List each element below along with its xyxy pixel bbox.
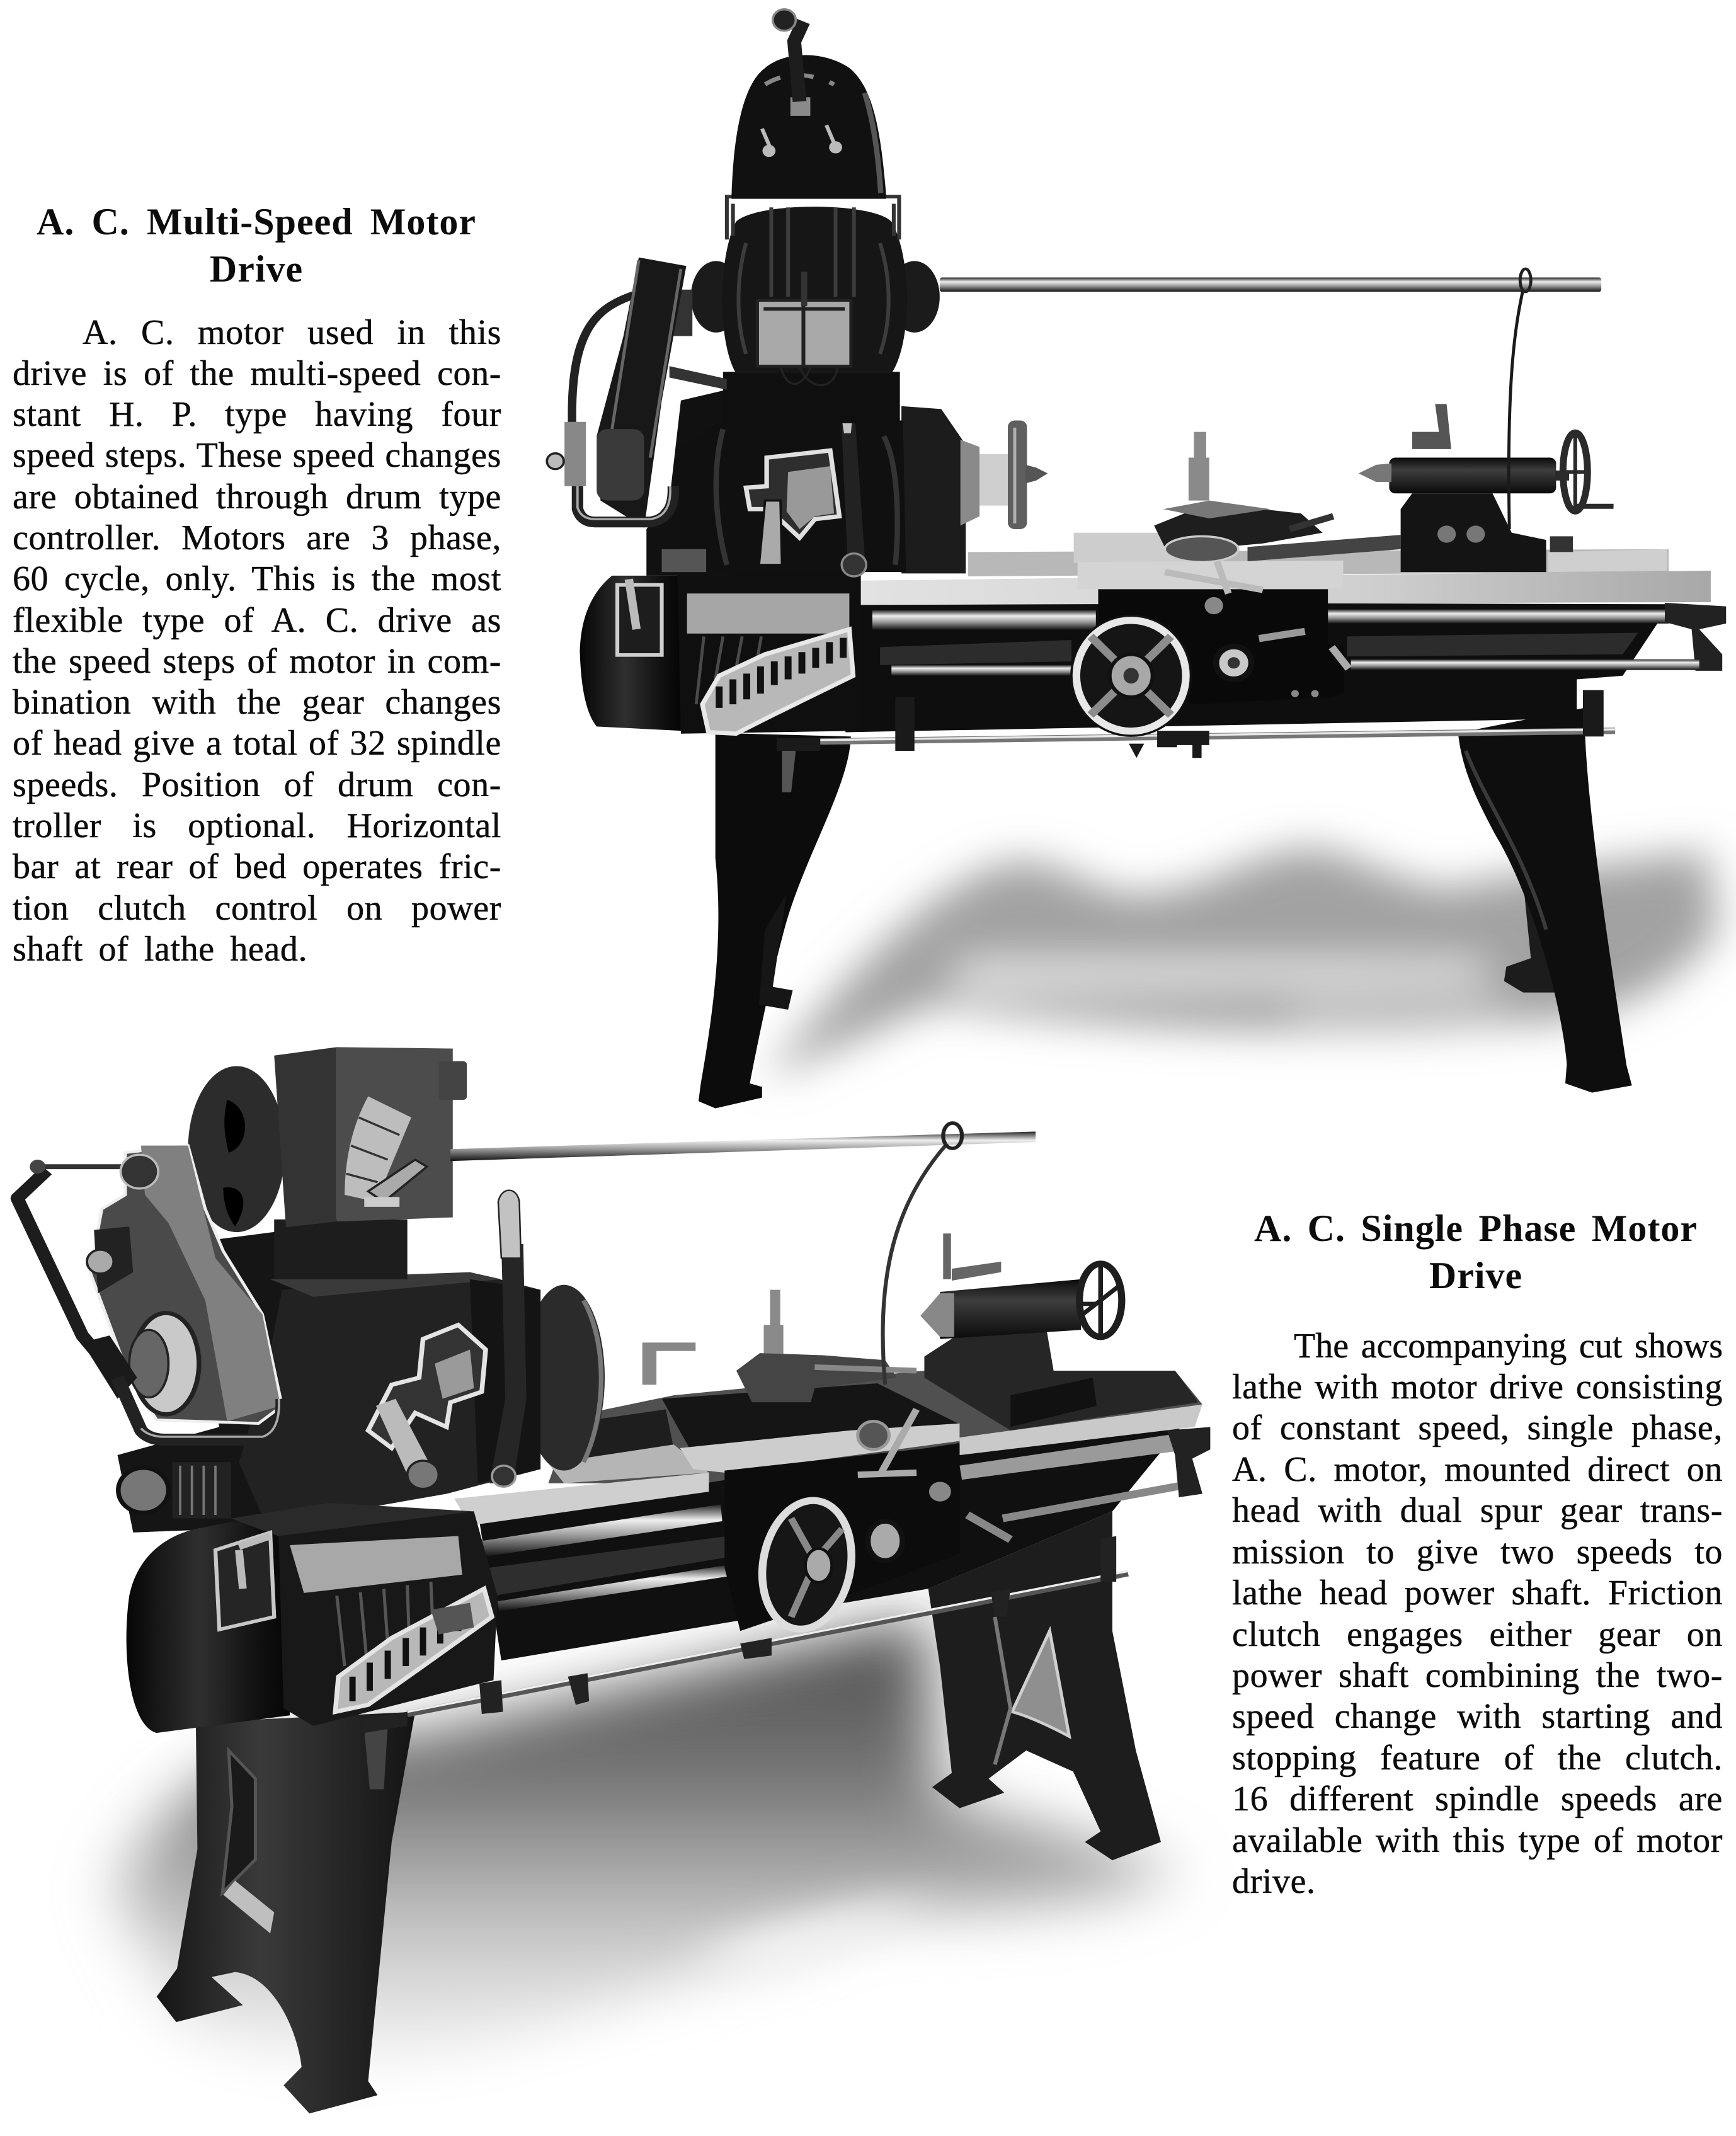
gearbox ribs [696, 636, 762, 704]
body text: multi-speed: 60 cycle, only. This is the most [13, 559, 501, 598]
shift handle [759, 501, 782, 565]
heading: multi-speed: A. C. Multi-Speed Motor [37, 201, 476, 243]
head rear cover [901, 406, 966, 573]
apron [724, 1444, 959, 1631]
body text: single phase: head with dual spur gear trans- [1232, 1491, 1723, 1530]
controller side [274, 1047, 337, 1227]
speed index plate [702, 629, 853, 734]
apron controls [1165, 561, 1349, 697]
head stock [239, 1276, 540, 1526]
controller handle [364, 1197, 399, 1206]
feed rod right [1351, 660, 1699, 670]
gear teeth [180, 1466, 215, 1515]
body text: multi-speed: A. C. motor used in this [83, 312, 501, 351]
illustration: lathe with A.C. multi-speed motor drive [547, 9, 1726, 1109]
starter lever [801, 271, 808, 306]
control rod highlight [819, 729, 1615, 740]
rear right leg [1504, 844, 1563, 993]
lever foot [842, 554, 866, 576]
control rod [819, 731, 1615, 741]
tailstock clamp [1412, 404, 1451, 449]
starter panel [758, 300, 851, 366]
star handles [858, 1409, 917, 1475]
gear mass behind guard [118, 1230, 313, 1533]
body text: multi-speed: controller. Motors are 3 phase, [13, 518, 501, 557]
cross slide [662, 1383, 959, 1455]
control rod [408, 1573, 1128, 1714]
gearbox case [677, 568, 861, 734]
dial hub [1228, 657, 1240, 668]
clutch lever [840, 392, 865, 566]
motor [188, 1066, 285, 1232]
rod ring [1520, 269, 1531, 292]
lead screw right [959, 1431, 1200, 1480]
rear way block [1548, 549, 1667, 572]
slide dial [1165, 536, 1238, 562]
gear guard spokes [94, 1226, 133, 1293]
hood marks [762, 125, 840, 155]
clamp arc [882, 1139, 952, 1385]
clutch bar [940, 277, 1601, 292]
head shift plate [368, 1325, 486, 1448]
clutch bar [450, 1131, 1036, 1161]
gear shift lever plate [617, 585, 662, 655]
body text: multi-speed: bination with the gear changes [13, 683, 501, 722]
head highlight [716, 429, 898, 565]
lead screw end bracket [1665, 603, 1726, 671]
bed mid highlight [880, 633, 1638, 665]
body text: single phase: available with this type of motor [1232, 1821, 1723, 1860]
lever on leg [782, 751, 796, 792]
motor support [723, 372, 900, 423]
carriage hand wheel [1071, 615, 1191, 736]
index notches [353, 1606, 459, 1701]
body text: single phase: of constant speed, single phase, [1232, 1408, 1723, 1448]
body text: multi-speed: speeds. Position of drum con- [13, 765, 501, 804]
compound screw [814, 1367, 917, 1371]
controller front [337, 1047, 453, 1221]
control pipe [578, 486, 673, 522]
apron controls [858, 1409, 1010, 1561]
controller handle [794, 21, 803, 101]
rim [753, 1495, 860, 1635]
rod brackets [777, 690, 1604, 758]
apron knob [929, 1482, 951, 1502]
front left leg [699, 733, 851, 1109]
feed rod left [498, 1565, 730, 1611]
pipe highlight [141, 1399, 279, 1437]
gear shift lever [629, 580, 636, 629]
handle ball [408, 1461, 438, 1489]
heading second line: multi-speed: Drive [210, 248, 303, 290]
controller hub [791, 97, 810, 116]
compound rest [1154, 503, 1323, 552]
shift plate [215, 1533, 274, 1630]
plate inner [787, 466, 834, 529]
motor left bell [691, 261, 741, 333]
head stock [681, 420, 906, 572]
apron [1098, 589, 1344, 704]
gearbox name plate [687, 593, 849, 634]
oil cup [438, 1061, 467, 1100]
spokes [791, 1519, 842, 1617]
head center [1025, 465, 1048, 483]
sector lines [346, 1117, 399, 1182]
floor shadow [118, 1617, 1175, 2062]
far leg highlight [995, 1617, 1010, 1764]
bell highlight [583, 1300, 601, 1462]
tool post [1189, 432, 1209, 501]
bed body [845, 602, 1670, 732]
tailstock hand wheel [1555, 433, 1614, 511]
saddle wing left [1074, 533, 1200, 563]
hood highlight [865, 93, 881, 193]
rear left leg foot [759, 894, 792, 1010]
motor body [722, 207, 907, 374]
face plate [1008, 420, 1027, 529]
leg lever [364, 1726, 388, 1789]
body text: single phase: lathe with motor drive consisting [1232, 1368, 1723, 1407]
saddle [680, 1424, 959, 1473]
handle knob [773, 9, 796, 31]
lead screw right [1328, 609, 1669, 624]
motor ribs [738, 207, 889, 354]
body text: multi-speed: speed steps. These speed changes [13, 436, 501, 475]
far leg window [1012, 1631, 1070, 1737]
heading: single phase: A. C. Single Phase Motor [1254, 1208, 1698, 1249]
body text: multi-speed: stant H. P. type having four [13, 395, 501, 434]
front bed way [857, 571, 1711, 605]
gearbox top [231, 1503, 474, 1536]
starter divider [763, 300, 845, 366]
gear [662, 549, 706, 572]
arm rod [43, 1165, 122, 1169]
near leg window [222, 1750, 255, 1893]
clutch star [858, 1421, 889, 1449]
gear dial [868, 1521, 903, 1561]
top pulley [121, 1155, 158, 1189]
resistor sector [345, 1097, 411, 1202]
top clutch handle [1165, 561, 1263, 593]
body text: single phase: mission to give two speeds to [1232, 1533, 1723, 1572]
body text: multi-speed: troller is optional. Horizontal [13, 806, 501, 845]
body text: single phase: A. C. motor, mounted direct on [1232, 1450, 1723, 1489]
controller mount [274, 1219, 408, 1279]
belt support [670, 290, 727, 390]
guard hub [87, 1250, 113, 1274]
head bracket mass [646, 390, 734, 576]
saddle wing right [1248, 535, 1401, 561]
rim outline [1071, 615, 1191, 736]
tailstock base [924, 1325, 1199, 1431]
motor openings [223, 1100, 245, 1226]
gearbox name plate [290, 1536, 462, 1593]
rear handle [642, 1342, 695, 1385]
gear band [141, 1146, 280, 1421]
hub [1110, 654, 1153, 697]
lead screw left [482, 1504, 722, 1557]
gear dial [1216, 646, 1252, 679]
control rod highlight [408, 1571, 1128, 1712]
spindle nose [961, 440, 979, 525]
body text: single phase: 16 different spindle speeds are [1232, 1779, 1723, 1819]
compound rest [736, 1353, 897, 1402]
body text: multi-speed: flexible type of A. C. drive as [13, 601, 501, 640]
rear bed way [968, 549, 1669, 576]
body text: single phase: stopping feature of the clutch. [1232, 1739, 1723, 1778]
tailstock base [1401, 493, 1546, 572]
hood scale [765, 75, 834, 84]
body text: multi-speed: tion clutch control on power [13, 889, 501, 928]
bed highlight band [489, 1536, 729, 1596]
apron lever [1259, 631, 1305, 639]
compound highlight [1163, 501, 1271, 518]
compound handle [1289, 517, 1333, 529]
rim [1076, 620, 1186, 731]
spindle [979, 454, 1008, 506]
spokes [1090, 636, 1171, 715]
gearbox drum [127, 1511, 290, 1733]
starter wires [780, 366, 838, 385]
index notches [719, 638, 843, 708]
saddle top [1078, 561, 1343, 589]
lever grip [838, 389, 854, 433]
head top [270, 1272, 501, 1297]
belt guard arc [572, 295, 635, 425]
body text: multi-speed: bar at rear of bed operates fric- [13, 847, 501, 886]
head rear bell [523, 1285, 605, 1471]
gearbox ribs [337, 1582, 432, 1666]
carriage hand wheel [753, 1495, 860, 1635]
clutch lever [489, 1244, 527, 1483]
controller arm [368, 1160, 427, 1202]
belt edge highlight [612, 260, 681, 458]
body text: multi-speed: the speed steps of motor in com- [13, 642, 501, 681]
wire frame [727, 197, 899, 239]
far leg [928, 1511, 1161, 1860]
lever foot [492, 1466, 515, 1487]
feed rod right [1003, 1483, 1194, 1519]
body text: single phase: speed change with starting and [1232, 1697, 1723, 1736]
body text: single phase: lathe head power shaft. Friction [1232, 1573, 1723, 1613]
motor right bell [889, 261, 940, 333]
shift handle [376, 1399, 432, 1483]
gear shift handle [431, 1603, 474, 1635]
tool post [764, 1290, 784, 1357]
motor belt [597, 258, 686, 528]
front right leg [1458, 708, 1632, 1093]
body text: single phase [1232, 1327, 1723, 1901]
body text: single phase: clutch engages either gear on [1232, 1615, 1723, 1654]
hub center [1124, 668, 1139, 683]
tailstock barrel [1389, 458, 1556, 493]
rod ring [943, 1123, 962, 1148]
small gear hub [118, 1468, 168, 1513]
pulley [597, 429, 644, 501]
small stop block [1550, 536, 1573, 552]
gear guard [90, 1146, 282, 1424]
drum controller hood [731, 55, 886, 199]
leg highlight [1466, 751, 1546, 930]
rod end bracket [1167, 1427, 1210, 1497]
rear way [568, 1409, 673, 1462]
floor shadow [765, 848, 1718, 1080]
pulley nut [547, 454, 564, 469]
lever grip [498, 1191, 521, 1258]
body text: single phase: drive. [1232, 1862, 1316, 1901]
tailstock nose [920, 1293, 954, 1337]
tailstock clamp [943, 1233, 1001, 1281]
rod brackets [362, 1536, 1116, 1733]
speed index plate [335, 1589, 492, 1712]
gearbox drum [580, 576, 681, 731]
bed ways right [959, 1405, 1202, 1455]
face plate highlight [1014, 428, 1016, 523]
tailstock bolts [1437, 525, 1485, 543]
heading second line: single phase: Drive [1429, 1255, 1522, 1296]
lead screw left [872, 610, 1096, 630]
body text: single phase: The accompanying cut shows [1294, 1327, 1723, 1366]
arm knob [30, 1160, 45, 1174]
apron lever [968, 1515, 1010, 1539]
lower hub rings [133, 1313, 199, 1414]
near leg [157, 1712, 415, 2113]
tailstock hand wheel [1080, 1264, 1122, 1337]
pulley hub [564, 422, 586, 486]
tailstock center point [1359, 464, 1391, 482]
plate inner [435, 1350, 474, 1399]
curved arm [17, 1170, 106, 1364]
end clutch arm [83, 1335, 137, 1399]
body text: multi-speed: drive is of the multi-speed con- [13, 354, 501, 393]
rear bed deck [549, 1371, 1202, 1483]
feed rod left [891, 665, 1071, 676]
illustration: lathe with A.C. single phase motor drive [17, 1047, 1210, 2113]
shift lever [239, 1536, 270, 1589]
shadow light patch [689, 1902, 940, 1975]
apron knobs [1204, 597, 1319, 697]
rear way light [549, 1444, 709, 1483]
tailstock barrel [940, 1279, 1081, 1339]
control pipe [118, 1378, 282, 1439]
body text: multi-speed: shaft of lathe head. [13, 930, 307, 969]
tailstock slide [1010, 1378, 1097, 1427]
hub center [129, 1330, 168, 1397]
bed ways left [454, 1473, 709, 1526]
near leg light panel [223, 1881, 274, 1933]
small gear [173, 1462, 231, 1519]
clamp arc [1509, 279, 1526, 529]
gearbox case [278, 1511, 498, 1726]
body text: multi-speed [13, 312, 501, 969]
feed knob [1332, 647, 1349, 668]
hub [805, 1549, 832, 1582]
body text: multi-speed: of head give a total of 32 spindle [13, 724, 501, 763]
bed body [478, 1406, 1199, 1660]
pipe highlight [578, 486, 670, 519]
head shading [470, 1279, 540, 1483]
body text: multi-speed: are obtained through drum type [13, 477, 501, 517]
head shift plate [746, 450, 840, 538]
body text: single phase: power shaft combining the two- [1232, 1656, 1723, 1695]
